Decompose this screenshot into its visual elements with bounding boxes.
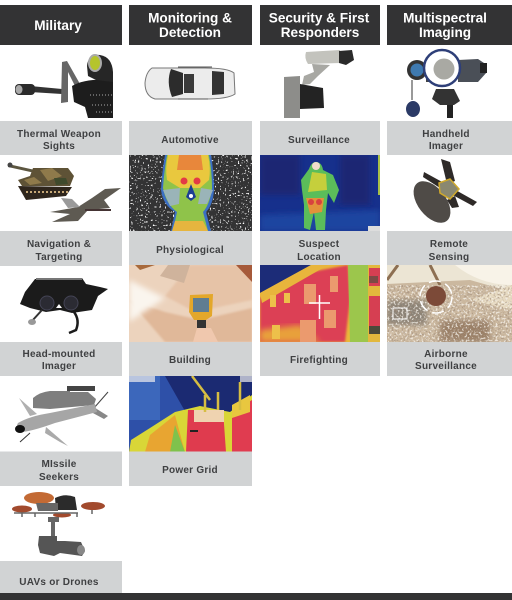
label: Missile Seekers: Seekers xyxy=(39,472,79,483)
label: Missile Seekers xyxy=(0,452,122,486)
image: thermal weapon sight on rifle xyxy=(15,55,113,118)
image: remote sensing satellite xyxy=(406,159,477,230)
label: Power Grid xyxy=(129,452,252,486)
label: Head-mounted Imager: Imager xyxy=(42,361,76,372)
column: Multispectral Imaging xyxy=(387,5,512,376)
label: Suspect Location: Suspect xyxy=(299,239,340,250)
label: Thermal Weapon Sights: Sights xyxy=(43,141,75,152)
label: Physiological xyxy=(129,231,252,265)
heading: Multispectral Imaging: Multispectral xyxy=(403,10,487,26)
label: Missile Seekers: MIssile xyxy=(41,459,77,470)
label: Head-mounted Imager: Head-mounted xyxy=(22,349,96,360)
heading: Monitoring & Detection xyxy=(129,5,252,45)
image: car from above xyxy=(145,67,235,99)
heading: Multispectral Imaging xyxy=(387,5,512,45)
image: airborne surveillance aerial view xyxy=(387,265,512,342)
label: UAVs or Drones: UAVs or Drones xyxy=(19,577,99,588)
label: Navigation & Targeting xyxy=(0,231,122,266)
label: Firefighting: Firefighting xyxy=(290,355,348,366)
label: Airborne Surveillance xyxy=(387,342,512,376)
label: Navigation & Targeting: Navigation & xyxy=(27,239,91,250)
label: Surveillance: Surveillance xyxy=(288,135,350,146)
heading: Security & First Responders xyxy=(260,5,380,45)
label: Remote Sensing: Sensing xyxy=(429,252,469,263)
label: Automotive xyxy=(129,121,252,155)
label: Suspect Location: Location xyxy=(297,252,341,263)
heading: Multispectral Imaging: Imaging xyxy=(419,25,471,40)
label: Head-mounted Imager xyxy=(0,342,122,376)
heading: Military xyxy=(0,5,122,45)
image: missile seeker xyxy=(15,386,108,446)
image: surveillance camera xyxy=(284,50,354,118)
label: Automotive: Automotive xyxy=(161,135,219,146)
label: Building xyxy=(129,342,252,376)
image: UAV drone xyxy=(12,492,105,556)
column: Security & First Responders xyxy=(260,5,380,376)
label: UAVs or Drones xyxy=(0,561,122,593)
label: Navigation & Targeting: Targeting xyxy=(35,252,83,263)
label: Airborne Surveillance: Airborne xyxy=(424,349,468,360)
column: Monitoring & Detection xyxy=(129,5,252,486)
image: power grid thermal view xyxy=(129,376,252,452)
label: Power Grid: Power Grid xyxy=(162,465,218,476)
heading: Security & First Responders: Responders xyxy=(281,25,359,40)
footer bar xyxy=(0,593,512,600)
label: Handheld Imager xyxy=(387,121,512,155)
label: Airborne Surveillance: Surveillance xyxy=(415,361,477,372)
heading: Security & First Responders: Security & First xyxy=(269,10,370,26)
label: Surveillance xyxy=(260,121,380,155)
image: head-mounted imager xyxy=(20,278,108,333)
heading: Monitoring & Detection: Detection xyxy=(159,25,221,40)
image: suspect location thermal view xyxy=(260,155,380,231)
image: building inspection with thermal camera xyxy=(129,265,252,342)
column: Military xyxy=(0,5,122,593)
label: Thermal Weapon Sights xyxy=(0,121,122,155)
label: Remote Sensing xyxy=(387,231,512,266)
label: Building: Building xyxy=(169,355,211,366)
heading: Monitoring & Detection: Monitoring & xyxy=(148,10,232,26)
label: Thermal Weapon Sights: Thermal Weapon xyxy=(17,129,101,140)
label: Physiological: Physiological xyxy=(156,245,224,256)
image: handheld multispectral imager xyxy=(406,50,487,118)
image: tank and fighter jet xyxy=(8,162,121,222)
image: firefighting thermal view xyxy=(260,265,380,342)
label: Firefighting xyxy=(260,342,380,376)
heading: Military: Military xyxy=(34,18,82,33)
label: Handheld Imager: Imager xyxy=(429,141,463,152)
label: Handheld Imager: Handheld xyxy=(422,129,470,140)
image: physiological thermal face xyxy=(129,155,252,231)
label: Suspect Location xyxy=(260,231,380,266)
label: Remote Sensing: Remote xyxy=(430,239,468,250)
